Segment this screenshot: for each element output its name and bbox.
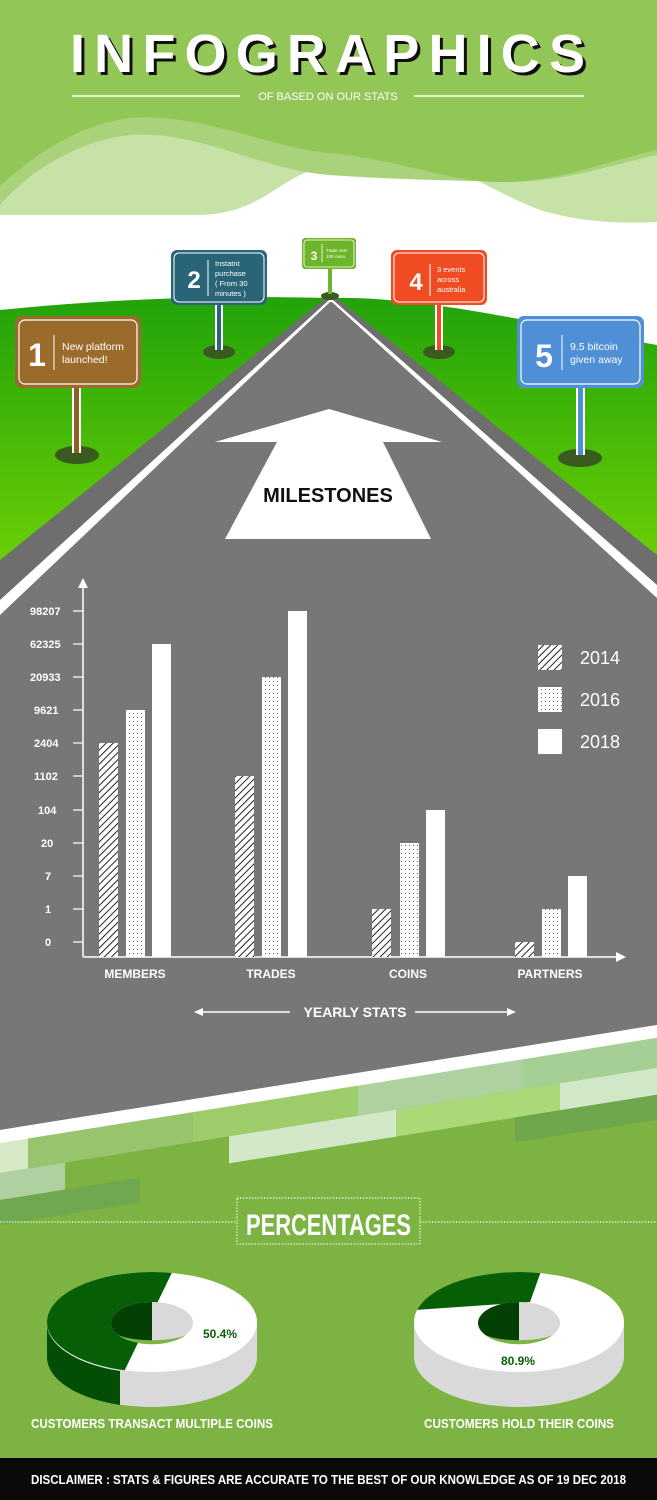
- yearly stats label: [194, 1004, 516, 1020]
- bottom green section: [0, 1040, 657, 1458]
- bar chart: 1102: [34, 771, 58, 783]
- bar chart: 98207: [30, 606, 61, 618]
- sign 4: australia: [437, 285, 466, 294]
- sign 3: Trade over: [326, 248, 348, 253]
- sign 5: [517, 316, 644, 467]
- sign 2: minutes ): [215, 289, 246, 298]
- donut 2: 80.9%: [501, 1354, 535, 1368]
- milestones arrow: MILESTONES: [263, 485, 393, 507]
- bar chart: 1: [45, 904, 51, 916]
- title: INFOGRAPHICS: [70, 24, 585, 84]
- bar chart: [30, 578, 626, 981]
- bar chart: 20: [41, 838, 53, 850]
- sign 1: New platform: [62, 341, 124, 353]
- hills: [0, 297, 657, 570]
- percentages heading: [0, 1198, 657, 1244]
- bar chart: TRADES: [246, 967, 296, 981]
- bar chart: 9621: [34, 705, 58, 717]
- sign 4: 4: [409, 269, 423, 296]
- sign 1: 1: [28, 337, 46, 373]
- sign 5: 9.5 bitcoin: [570, 341, 618, 353]
- bar chart: 7: [45, 871, 51, 883]
- bar chart: 20933: [30, 672, 61, 684]
- donut 1: [46, 1272, 257, 1407]
- bar chart: 62325: [30, 639, 61, 651]
- sign 2: purchase: [215, 269, 246, 278]
- sign 4: [391, 250, 487, 359]
- legend: [538, 645, 620, 754]
- donut captions: [31, 1417, 614, 1431]
- disclaimer: [0, 1458, 657, 1500]
- sign 5: 5: [535, 338, 553, 374]
- donut captions: CUSTOMERS HOLD THEIR COINS: [424, 1417, 614, 1431]
- title: INFOGRAPHICS: [73, 27, 588, 87]
- sign 4: 3 events: [437, 265, 466, 274]
- legend: 2014: [580, 648, 620, 668]
- sign 4: across: [437, 275, 459, 284]
- donut 2: [414, 1272, 624, 1407]
- donut 1: 50.4%: [203, 1327, 237, 1341]
- yearly stats label: YEARLY STATS: [304, 1004, 406, 1020]
- donut captions: CUSTOMERS TRANSACT MULTIPLE COINS: [31, 1417, 273, 1431]
- sign 3: 3: [311, 249, 318, 263]
- sign 5: given away: [570, 354, 623, 366]
- bar chart: PARTNERS: [517, 967, 583, 981]
- top band waves: [0, 0, 657, 223]
- road: [0, 296, 657, 1145]
- bar chart: 2404: [34, 738, 59, 750]
- sign 3: [302, 238, 356, 300]
- bar chart: MEMBERS: [104, 967, 166, 981]
- bar chart: 104: [38, 805, 57, 817]
- bar chart: COINS: [389, 967, 427, 981]
- sign 3: 100 coins: [326, 254, 346, 259]
- sign 2: Instatnt: [215, 259, 241, 268]
- sign 1: [15, 316, 141, 464]
- sign 2: 2: [187, 267, 201, 294]
- sign 2: [171, 250, 267, 359]
- milestones arrow: [215, 409, 442, 539]
- percentages heading: PERCENTAGES: [246, 1209, 411, 1242]
- decorative stripes: [0, 1038, 657, 1225]
- bar chart: 0: [45, 937, 51, 949]
- sign 1: launched!: [62, 354, 108, 366]
- sign 2: ( From 30: [215, 279, 248, 288]
- subtitle: OF BASED ON OUR STATS: [258, 91, 398, 103]
- legend: 2016: [580, 690, 620, 710]
- disclaimer: DISCLAIMER : STATS & FIGURES ARE ACCURATE TO THE BEST OF OUR KNOWLEDGE AS OF 19 DEC 2018: [31, 1473, 626, 1487]
- legend: 2018: [580, 732, 620, 752]
